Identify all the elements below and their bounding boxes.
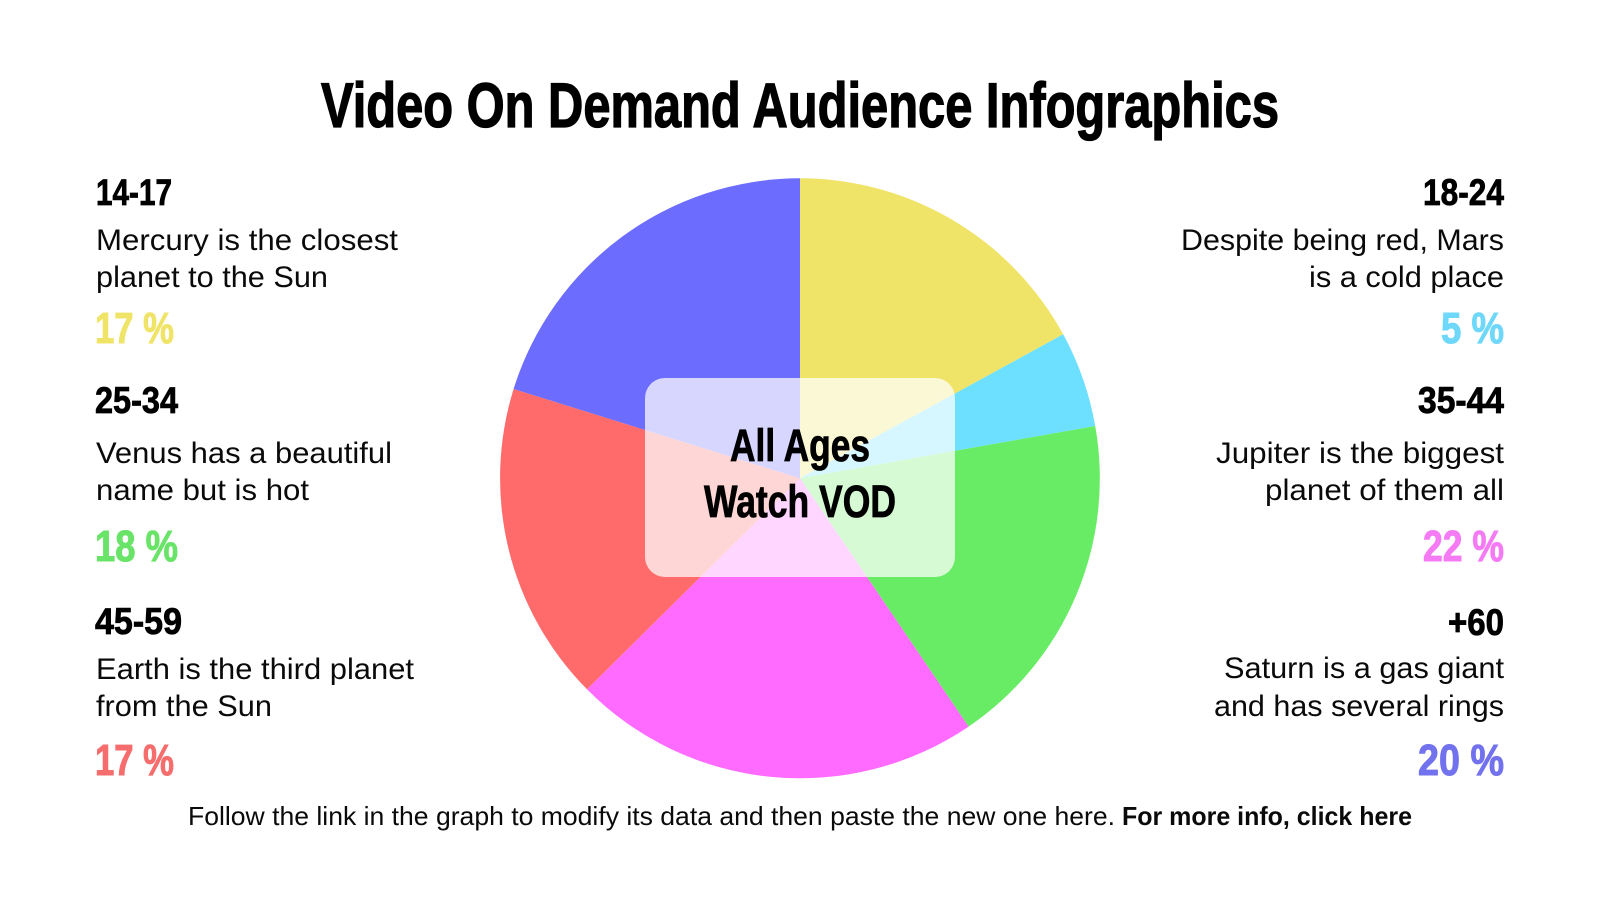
text: Mercury description: Mercury is the closest	[96, 224, 399, 257]
text: Saturn description: and has several rings	[1214, 690, 1504, 723]
text: Jupiter description: Jupiter is the biggest	[1216, 437, 1505, 470]
heading: 18-24: 18-24	[1423, 172, 1504, 213]
value: 22 %: 22 %	[1423, 522, 1504, 571]
heading: 14-17: 14-17	[96, 172, 172, 213]
text: Mars description: is a cold place	[1309, 261, 1504, 294]
heading: +60: +60	[1448, 602, 1504, 643]
footer note: Follow the link in the graph to modify its data and then paste the new one here.	[188, 801, 1115, 831]
value: 17 %: 17 %	[95, 736, 174, 785]
heading: 25-34: 25-34	[95, 380, 178, 421]
panel: age 45-59	[95, 601, 415, 785]
text: Earth description	[96, 653, 415, 723]
text: Venus description: name but is hot	[96, 474, 310, 507]
heading: 45-59: 45-59	[95, 601, 182, 642]
text: Mercury description: planet to the Sun	[96, 261, 328, 294]
panel: age 25-34	[95, 380, 392, 571]
text: Mars description	[1181, 224, 1504, 294]
pie chart	[500, 178, 1100, 778]
text: Earth description: Earth is the third planet	[96, 653, 415, 686]
text: Jupiter description: planet of them all	[1265, 474, 1504, 507]
value: 17 %: 17 %	[95, 304, 174, 353]
text: Saturn description	[1214, 652, 1505, 723]
value: 5 %: 5 %	[1441, 304, 1504, 353]
text: Venus description	[96, 437, 392, 507]
center card: All Ages Watch VOD	[645, 378, 955, 577]
footer note: For more info, click here	[1122, 801, 1412, 831]
text: Mars description: Despite being red, Mars	[1181, 224, 1504, 257]
panel: age +60	[1214, 602, 1505, 785]
panel: age 35-44	[1216, 380, 1505, 571]
heading: 35-44: 35-44	[1418, 380, 1504, 421]
text: Saturn description: Saturn is a gas giant	[1224, 652, 1505, 685]
title: Video On Demand Audience Infographics	[321, 71, 1279, 141]
text: Mercury description	[96, 224, 399, 294]
panel: age 18-24	[1181, 172, 1504, 353]
text: Jupiter description	[1216, 437, 1505, 507]
text: Earth description: from the Sun	[96, 690, 272, 723]
text: Venus description: Venus has a beautiful	[96, 437, 392, 470]
center card: All Ages Watch VOD: Watch VOD	[704, 476, 896, 527]
value: 18 %: 18 %	[95, 522, 178, 571]
value: 20 %: 20 %	[1418, 736, 1504, 785]
center card: All Ages Watch VOD: All Ages	[730, 420, 870, 471]
panel: age 14-17	[95, 172, 399, 353]
